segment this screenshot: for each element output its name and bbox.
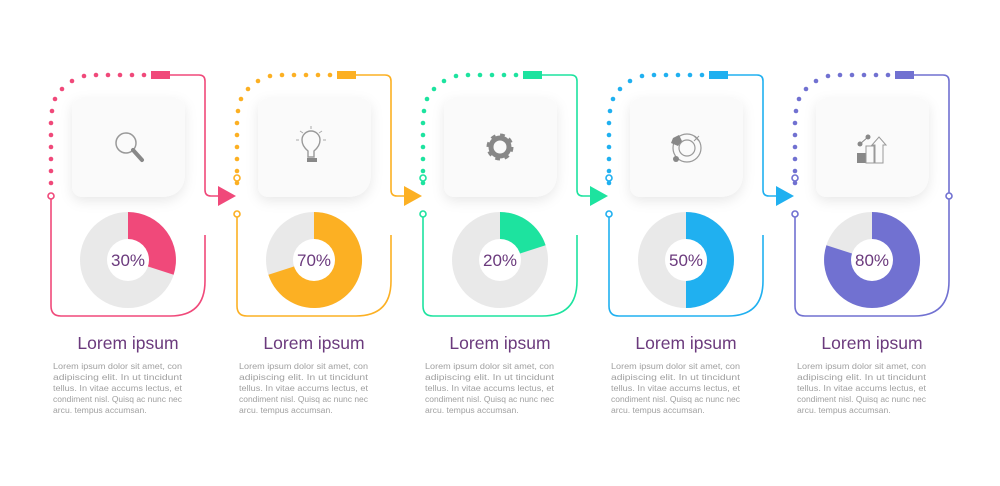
step 1: pink [48, 71, 236, 415]
donut 30% [80, 212, 176, 308]
donut 70%: 70% [297, 251, 331, 270]
step 2: orange [234, 71, 422, 415]
body text 5 [797, 361, 927, 415]
dotted path blue [607, 73, 704, 185]
title 3: Lorem ipsum [449, 333, 551, 353]
connector line purple [792, 71, 952, 316]
icon box: growth chart [816, 98, 929, 197]
donut 80%: 80% [855, 251, 889, 270]
dotted path green [421, 73, 518, 185]
arrow pink [218, 186, 236, 206]
step 3: green [420, 71, 608, 415]
donut 20% [452, 212, 548, 308]
arrow blue [776, 186, 794, 206]
donut 70% [266, 212, 362, 308]
step 4: blue [606, 71, 794, 415]
connector line green [420, 71, 592, 316]
body text 2 [239, 361, 369, 415]
title 2: Lorem ipsum [263, 333, 365, 353]
dotted path purple [793, 73, 890, 185]
title 5: Lorem ipsum [821, 333, 923, 353]
donut 50% [638, 212, 734, 308]
body text 3 [425, 361, 555, 415]
connector line pink [48, 71, 220, 316]
donut 50%: 50% [669, 251, 703, 270]
arrow green [590, 186, 608, 206]
step 5: purple [792, 71, 952, 415]
connector line blue [606, 71, 778, 316]
icon box: gear [444, 98, 557, 197]
icon box: bulb [258, 98, 371, 197]
title 1: Lorem ipsum [77, 333, 179, 353]
donut 20%: 20% [483, 251, 517, 270]
arrow orange [404, 186, 422, 206]
body text 1 [53, 361, 183, 415]
icon box: search [72, 98, 185, 197]
connector line orange [234, 71, 406, 316]
dotted path pink [49, 73, 146, 185]
dotted path orange [235, 73, 332, 185]
title 4: Lorem ipsum [635, 333, 737, 353]
donut 30%: 30% [111, 251, 145, 270]
body text 4 [611, 361, 741, 415]
icon box: target [630, 98, 743, 197]
donut 80% [824, 212, 920, 308]
